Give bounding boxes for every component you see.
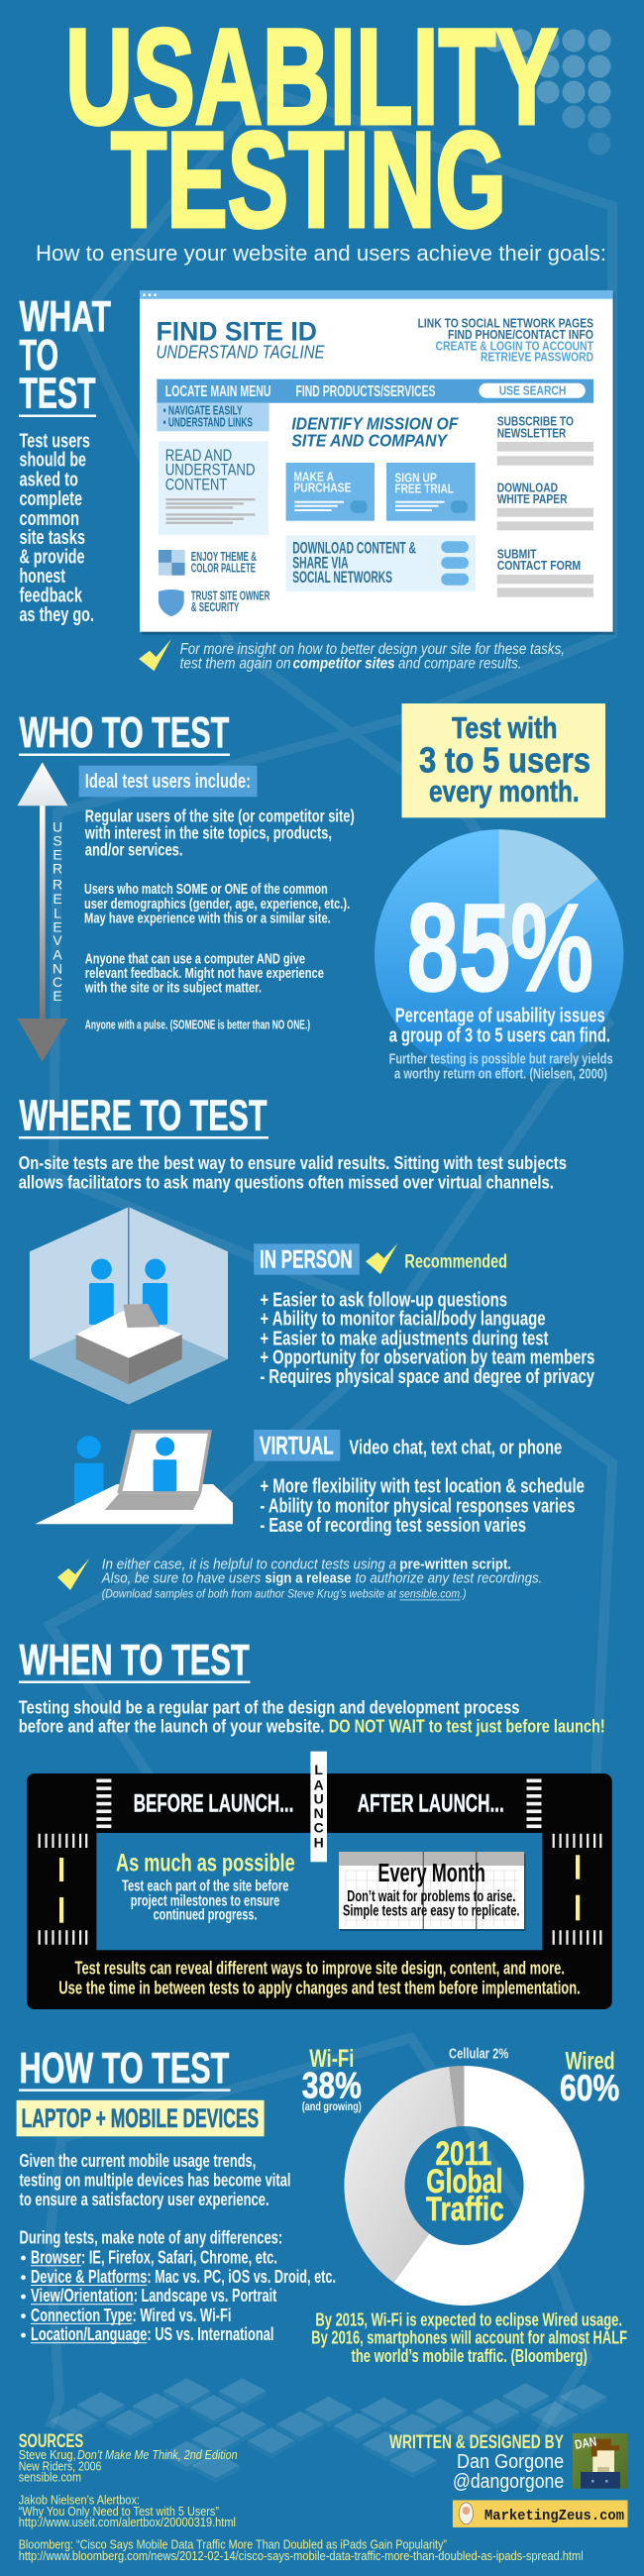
label: ideal test users: Ideal test users include:: [85, 770, 251, 793]
sidebar: SUBMIT: [497, 548, 537, 562]
sidebar: CONTACT FORM: [497, 559, 581, 573]
mission statement: SITE AND COMPANY: [291, 430, 448, 450]
text: what to test description: as they go.: [20, 603, 94, 626]
panel: when to test: [19, 1636, 612, 2009]
text: anyone with a computer: Anyone that can use a computer AND give: [85, 950, 305, 967]
text: matching users: Users who match SOME or ONE of the common: [84, 881, 328, 898]
illustration: virtual test laptop: [35, 1430, 233, 1524]
arrow: user relevance: R: [53, 877, 62, 893]
read and understand content box: READ AND: [165, 446, 232, 465]
sign up free trial card: FREE TRIAL: [394, 483, 454, 496]
text: mobile usage trends: Given the current mobile usage trends,: [20, 2150, 256, 2171]
callout: test with 3 to 5 users: Test with: [452, 710, 558, 745]
launch marker: C: [314, 1819, 324, 1835]
heading: when to test: WHEN TO TEST: [20, 1636, 250, 1684]
text: regular users: with interest in the site topics, products,: [84, 823, 332, 843]
text: anyone with a pulse: Anyone with a pulse. (SOMEONE is better than NO ONE.): [85, 1018, 310, 1031]
calendar: every month: [339, 1850, 525, 1931]
arrow: user relevance: [17, 762, 67, 1062]
read and understand content box: CONTENT: [165, 475, 227, 493]
subtitle: How to ensure your website and users achieve their goals:: [36, 241, 606, 266]
sources: http://www.bloomberg.com/news/2012-02-14/cisco-says-mobile-data-traffic-more-than-doubled-as-ipads-spread.html: [19, 2549, 584, 2563]
sidebar: [497, 415, 593, 597]
read and understand content box: [159, 441, 268, 535]
text: matching users: May have experience with this or a similar site.: [84, 911, 331, 927]
runway center dashes: [59, 1855, 580, 1923]
mission statement: [291, 413, 459, 450]
text: as much as possible: project milestones to ensure: [131, 1892, 280, 1909]
list: differences to note: : Landscape vs. Portrait: [134, 2285, 276, 2306]
text: on-site tests: [19, 1152, 567, 1192]
label: laptop and mobile devices: [17, 2100, 265, 2136]
sources: New Riders, 2006: [19, 2460, 101, 2474]
note: competitor sites: test them again on: [180, 656, 291, 673]
text: regular users: Regular users of the site (or competitor site): [85, 805, 355, 825]
dropdown menu: [157, 403, 269, 431]
read and understand content box: UNDERSTAND: [165, 460, 256, 479]
navigation bar: FIND PRODUCTS/SERVICES: [295, 383, 436, 400]
launch marker: A: [314, 1776, 324, 1792]
sources: [19, 2431, 584, 2563]
text: mobile usage trends: [20, 2150, 291, 2209]
sources: SOURCES: [19, 2431, 83, 2452]
title: [65, 2, 558, 256]
callout: test with 3 to 5 users: 3 to 5 users: [419, 739, 590, 780]
navigation bar: USE SEARCH: [499, 382, 566, 397]
label: cellular 2 percent: Cellular 2%: [449, 2046, 508, 2062]
text: regular part of process: [19, 1696, 605, 1737]
text: what to test description: & provide: [20, 546, 85, 569]
header links: CREATE & LOGIN TO ACCOUNT: [436, 339, 593, 353]
text: what to test description: asked to: [20, 469, 78, 491]
website wireframe window: [140, 290, 614, 634]
trust label: TRUST SITE OWNER: [191, 590, 269, 603]
panel: where to test: [19, 1092, 595, 1601]
theme and palette icon: [159, 550, 185, 576]
callout: test with 3 to 5 users: [402, 703, 605, 817]
logo: marketing zeus: [453, 2501, 628, 2527]
sidebar: WHITE PAPER: [497, 492, 568, 506]
arrow: user relevance: S: [53, 832, 62, 848]
list: differences to note: During tests, make note of any differences:: [20, 2227, 282, 2248]
calendar: every month: Don’t wait for problems to arise.: [347, 1888, 515, 1905]
label: virtual: VIRTUAL: [260, 1432, 334, 1459]
navigation bar: LOCATE MAIN MENU: [165, 383, 271, 400]
text: as much as possible: Test each part of the site before: [122, 1878, 289, 1894]
text: what to test description: site tasks: [20, 526, 85, 549]
text: anyone with a computer: with the site or its subject matter.: [84, 980, 262, 997]
credit: written and designed by: WRITTEN & DESIGNED BY: [389, 2432, 564, 2453]
note: pre-written script: In either case, it is helpful to conduct tests using a: [102, 1556, 396, 1572]
sources: sensible.com: [19, 2471, 81, 2485]
trust label: [191, 590, 269, 614]
label: wi-fi 38 percent: (and growing): [302, 2099, 362, 2113]
arrow: user relevance: R: [53, 861, 62, 877]
arrow: user relevance: E: [53, 988, 62, 1004]
text: what to test description: Test users: [20, 430, 90, 453]
theme label: [191, 550, 257, 575]
icon: pixel avatar: DAN: [574, 2433, 597, 2452]
note: pre-written script: pre-written script.: [399, 1556, 511, 1572]
text: test results: [58, 1958, 581, 1997]
list: virtual pros and cons: - Ease of recording test session varies: [260, 1515, 526, 1537]
runway stripes: [39, 1779, 601, 1945]
sidebar: SUBSCRIBE TO: [497, 415, 574, 429]
list: in person pros and cons: + Easier to ask follow-up questions: [260, 1289, 507, 1311]
text: as much as possible: continued progress.: [154, 1907, 258, 1924]
arrow: user relevance: C: [53, 974, 62, 990]
text: what to test description: common: [20, 507, 79, 530]
panel: what to test: [19, 290, 614, 673]
text: percentage caption: [389, 1005, 610, 1047]
sources: “Why You Only Need to Test with 5 Users”: [19, 2505, 219, 2519]
calendar: every month: Simple tests are easy to replicate.: [343, 1903, 519, 1920]
list: differences to note: [20, 2227, 336, 2344]
text: mobile usage trends: to ensure a satisfactory user experience.: [20, 2189, 269, 2209]
note: pre-written script: [101, 1556, 542, 1601]
pie chart: 85 percent: [375, 829, 623, 1079]
label: virtual: [254, 1430, 340, 1461]
header links: LINK TO SOCIAL NETWORK PAGES: [418, 317, 593, 331]
theme label: COLOR PALLETE: [191, 561, 256, 575]
dropdown menu: • NAVIGATE EASILY: [163, 404, 243, 418]
note: pre-written script: (Download samples of both from author Steve Krug’s website at sensible.com.): [102, 1587, 467, 1601]
note: pre-written script: sign a release: [265, 1569, 351, 1586]
sign up free trial card: [386, 463, 476, 521]
make a purchase card: PURCHASE: [293, 482, 351, 495]
text: what to test description: should be: [20, 449, 86, 472]
sources: http://www.useit.com/alertbox/20000319.html: [19, 2516, 236, 2529]
heading: how to test: HOW TO TEST: [20, 2044, 229, 2093]
list: differences to note: Connection Type: [31, 2305, 133, 2325]
make a purchase card: [286, 463, 375, 521]
arrow: user relevance: N: [53, 960, 62, 976]
site id: [157, 316, 325, 363]
launch marker: U: [314, 1790, 324, 1806]
header links: [418, 317, 593, 365]
heading: what to test: TO: [20, 331, 58, 379]
label: in person: [254, 1243, 360, 1275]
icon: check mark script: [57, 1558, 89, 1590]
text: mobile usage trends: testing on multiple devices has become vital: [20, 2169, 291, 2190]
heading: what to test: [19, 292, 111, 418]
sidebar: NEWSLETTER: [497, 426, 566, 440]
download and share box: [286, 535, 476, 591]
icon: security shield: [159, 590, 184, 616]
arrow: user relevance: L: [54, 905, 61, 920]
credit: written and designed by: Dan Gorgone: [457, 2451, 564, 2473]
note: pre-written script: to authorize any test recordings.: [356, 1569, 542, 1586]
donut chart: 2011 global traffic: 2011: [436, 2135, 491, 2173]
text: further testing note: [389, 1050, 613, 1082]
label: wi-fi 38 percent: [302, 2045, 362, 2113]
header links: FIND PHONE/CONTACT INFO: [448, 328, 593, 342]
list: differences to note: : US vs. International: [147, 2323, 273, 2344]
list: in person pros and cons: + Ability to monitor facial/body language: [260, 1309, 546, 1331]
text: what to test description: honest: [20, 565, 65, 588]
label: in person: IN PERSON: [260, 1245, 353, 1273]
download and share box: SHARE VIA: [292, 553, 349, 572]
text: regular users: [84, 805, 355, 859]
theme label: ENJOY THEME &: [191, 550, 257, 564]
panel: how to test: [17, 2044, 627, 2366]
list: in person pros and cons: [260, 1289, 595, 1388]
launch marker: L: [314, 1762, 323, 1777]
text: as much as possible: [116, 1849, 295, 1924]
list: differences to note: Location/Language: [31, 2323, 147, 2344]
sources: Bloomberg: “Cisco Says Mobile Data Traffic More Than Doubled as iPads Gain Popularity”: [19, 2538, 447, 2552]
label: wired 60 percent: 60%: [560, 2068, 619, 2108]
text: regular users: and/or services.: [85, 839, 182, 859]
text: virtual channels: Video chat, text chat, or phone: [349, 1438, 562, 1459]
list: differences to note: Device & Platforms: [31, 2266, 147, 2287]
sources: Steve Krug,: [19, 2448, 76, 2462]
credit: written and designed by: [389, 2432, 564, 2493]
site id: FIND SITE ID: [157, 316, 317, 346]
arrow: user relevance: E: [53, 891, 62, 907]
credit: written and designed by: @dangorgone: [453, 2471, 564, 2493]
site id: UNDERSTAND TAGLINE: [157, 343, 325, 363]
calendar: every month: Every Month: [377, 1860, 485, 1887]
donut chart: 2011 global traffic: Global: [426, 2163, 503, 2200]
heading: what to test: TEST: [20, 370, 96, 418]
text: matching users: [84, 881, 350, 927]
launch marker: N: [314, 1805, 324, 1821]
text: what to test description: feedback: [20, 585, 82, 607]
arrow: user relevance: A: [53, 946, 62, 962]
label: wi-fi 38 percent: 38%: [302, 2066, 362, 2106]
sign up free trial card: SIGN UP: [394, 471, 437, 484]
launch marker: [310, 1752, 327, 1862]
text: anyone with a computer: relevant feedback. Might not have experience: [85, 965, 324, 982]
arrow: user relevance: E: [53, 846, 62, 862]
sources: Jakob Nielsen’s Alertbox:: [19, 2494, 140, 2508]
list: virtual pros and cons: [260, 1476, 585, 1537]
note: competitor sites: [180, 641, 565, 673]
arrow: user relevance: E: [53, 919, 62, 935]
download and share box: DOWNLOAD CONTENT &: [292, 539, 416, 558]
label: wired 60 percent: Wired: [565, 2048, 615, 2076]
donut chart: 2011 global traffic: [344, 2066, 585, 2306]
list: differences to note: : IE, Firefox, Safari, Chrome, etc.: [81, 2246, 277, 2267]
heading: who to test: WHO TO TEST: [20, 708, 229, 757]
donut chart: 2011 global traffic: Traffic: [426, 2191, 504, 2228]
note: competitor sites: competitor sites: [293, 656, 395, 673]
text: matching users: user demographics (gender, age, experience, etc.).: [84, 896, 350, 912]
sources: Don’t Make Me Think, 2nd Edition: [77, 2448, 238, 2462]
text: traffic forecast: [311, 2309, 627, 2366]
launch marker: H: [314, 1834, 324, 1850]
list: differences to note: : Wired vs. Wi-Fi: [133, 2305, 231, 2325]
illustration: in-person test room: [30, 1207, 228, 1404]
label: ideal test users: [79, 766, 257, 797]
icon: pixel avatar: [573, 2433, 628, 2489]
panel: who to test: [17, 703, 623, 1082]
sidebar: DOWNLOAD: [497, 481, 558, 494]
text: as much as possible: As much as possible: [116, 1849, 295, 1877]
text: anyone with a computer: [84, 950, 324, 997]
label: recommended: Recommended: [404, 1250, 507, 1272]
callout: test with 3 to 5 users: every month.: [429, 774, 580, 808]
logo: marketing zeus: MarketingZeus.com: [484, 2508, 624, 2524]
icon: check mark: [139, 639, 171, 671]
label: wi-fi 38 percent: Wi-Fi: [309, 2045, 354, 2073]
download and share box: SOCIAL NETWORKS: [292, 568, 392, 587]
heading: what to test: WHAT: [20, 292, 111, 341]
label: after launch: AFTER LAUNCH...: [358, 1789, 504, 1817]
label: before launch: BEFORE LAUNCH...: [134, 1789, 293, 1817]
dropdown menu: • UNDERSTAND LINKS: [163, 415, 253, 429]
label: laptop and mobile devices: LAPTOP + MOBILE DEVICES: [22, 2103, 259, 2133]
list: differences to note: : Mac vs. PC, iOS vs. Droid, etc.: [147, 2266, 336, 2287]
arrow: user relevance: U: [53, 818, 62, 834]
note: competitor sites: For more insight on how to better design your site for these tasks,: [180, 641, 565, 658]
text: what to test description: complete: [20, 487, 82, 510]
note: pre-written script: Also, be sure to have users: [101, 1569, 262, 1586]
icon: check mark recommended: [366, 1243, 397, 1274]
arrow: user relevance: V: [53, 932, 62, 948]
list: differences to note: Browser: [31, 2246, 81, 2267]
runway diagram: [27, 1752, 612, 2009]
note: competitor sites: and compare results.: [398, 656, 521, 673]
trust label: & SECURITY: [191, 600, 240, 614]
make a purchase card: MAKE A: [293, 470, 334, 483]
list: in person pros and cons: + Easier to make adjustments during test: [260, 1328, 549, 1349]
text: regular part of process: before and after the launch of your website.: [19, 1716, 324, 1737]
label: wired 60 percent: [560, 2048, 619, 2108]
text: regular part of process: Testing should be a regular part of the design and development process: [19, 1696, 519, 1717]
header links: RETRIEVE PASSWORD: [481, 351, 593, 365]
mission statement: IDENTIFY MISSION OF: [291, 413, 459, 433]
text: what to test description: [20, 430, 94, 626]
list: differences to note: View/Orientation: [31, 2285, 134, 2306]
navigation bar: [157, 379, 593, 403]
heading: where to test: WHERE TO TEST: [20, 1092, 268, 1140]
